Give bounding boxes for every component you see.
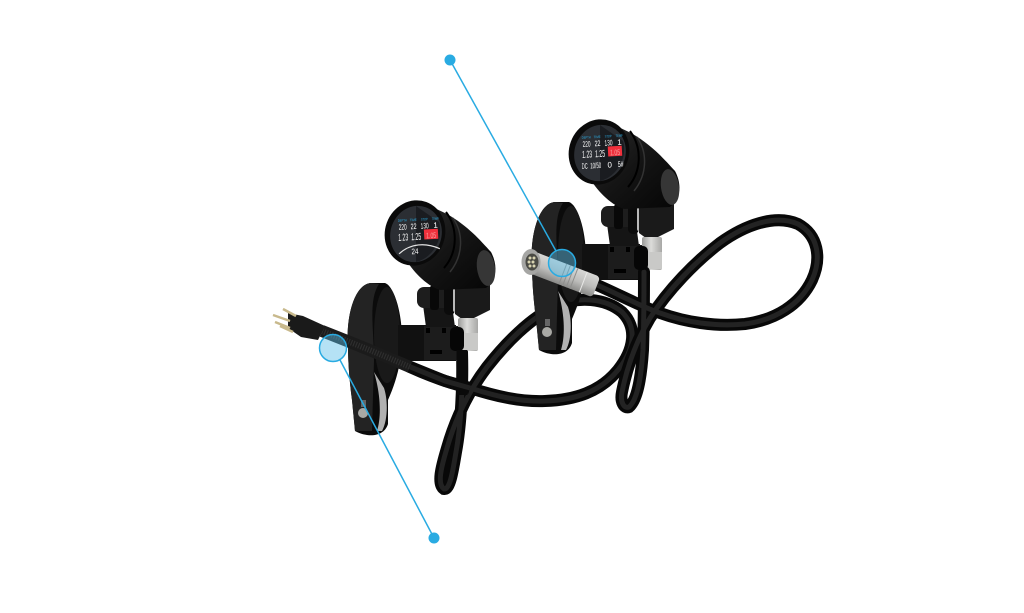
callout: bottom pointer <box>320 334 440 544</box>
screen readout 2: 5# <box>617 160 624 169</box>
screen readout 1: 130 <box>420 221 429 231</box>
vertical cable stubs <box>462 270 644 395</box>
screen readout 1: 22 <box>410 222 417 231</box>
clamp ring 2 <box>532 202 586 354</box>
screen readout 2: DEPTH <box>582 135 591 140</box>
lens housing 1 <box>376 192 497 290</box>
screen readout 1: TIME <box>410 218 417 222</box>
screen readout 1 <box>397 217 441 257</box>
screen readout 1: 220 <box>398 222 407 232</box>
screen readout 2: TIME <box>594 135 601 139</box>
screen readout 1: 1 <box>433 221 439 230</box>
device unit 2 <box>532 111 681 354</box>
lens housing 2 <box>560 111 681 209</box>
screen readout 2: DC <box>581 162 588 171</box>
screen readout 2 <box>580 134 625 171</box>
screen readout 1: TEMP <box>432 217 439 221</box>
callout: top pointer <box>444 54 576 276</box>
silver connector 2 <box>642 237 662 270</box>
screen readout 1: 1.23 <box>398 232 409 244</box>
screen readout 2: STOP <box>605 134 612 139</box>
screen readout 2: 10/50 <box>590 161 602 170</box>
screen readout 1: STOP <box>421 217 428 222</box>
screen readout 2: 1.23 <box>582 149 593 161</box>
mounting bracket <box>398 278 490 361</box>
small knob over cable, unit 2 <box>634 246 648 270</box>
mounting bracket 2 <box>582 197 674 280</box>
cable: first unit loop <box>410 300 632 489</box>
clamp ring 1 <box>348 283 402 435</box>
device unit 1 <box>348 192 497 435</box>
screen readout 2: 0 <box>607 160 613 170</box>
screen readout 2: 130 <box>604 138 613 148</box>
screen readout 1: 1.05 <box>426 231 437 240</box>
cable front section over first clamp <box>322 331 470 388</box>
screen readout 1: 1.25 <box>411 232 422 243</box>
screen readout 2: TEMP <box>616 134 623 138</box>
screen readout 2: 22 <box>594 139 601 148</box>
screen readout 2: 1.25 <box>595 149 606 160</box>
screen readout 2: 1 <box>617 138 623 147</box>
screen readout 2: 1.05 <box>610 148 621 157</box>
silver connector 1 <box>450 318 478 351</box>
screen readout 1: DEPTH <box>398 218 407 223</box>
silver plug connector <box>522 249 600 297</box>
pin connector tip <box>273 309 325 340</box>
screen readout 1: 24 <box>411 247 419 256</box>
cable: second unit loop <box>597 220 817 407</box>
screen readout 2: 220 <box>582 139 591 149</box>
